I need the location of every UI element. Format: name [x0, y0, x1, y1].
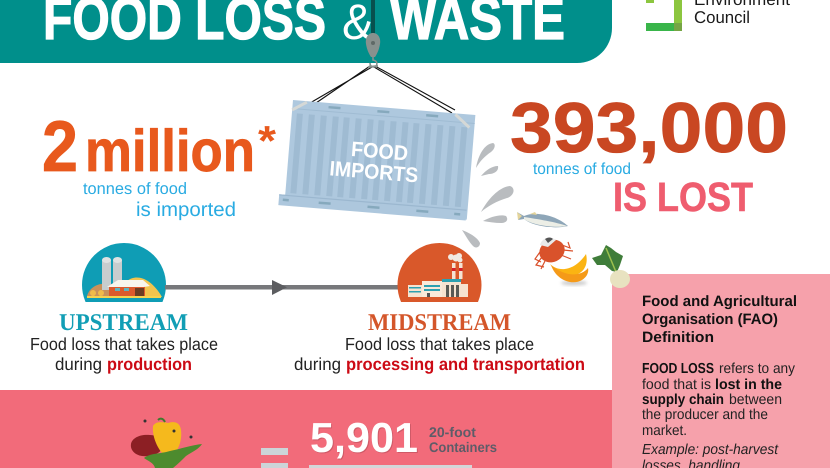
text: food loss definition: lost in the	[715, 377, 782, 393]
statistic: 2 million tonnes imported: tonnes of food	[83, 180, 187, 198]
panel: food waste statistic: 20-foot	[429, 424, 476, 440]
heading: FAO definition: Organisation (FAO)	[642, 311, 778, 328]
heading: FAO definition: Definition	[642, 329, 714, 346]
panel: upstream: production	[107, 354, 192, 374]
illustration: gray splashes	[462, 143, 514, 247]
illustration: crane ropes and hook	[310, 0, 455, 113]
text: food loss definition: supply chain	[642, 392, 724, 408]
panel: upstream: UPSTREAM	[59, 310, 188, 336]
logo: Environment Council: Council	[694, 8, 750, 27]
statistic: 393,000 tonnes lost: 393,000	[510, 89, 788, 168]
statistic: 2 million tonnes imported: is imported	[136, 199, 236, 221]
text: food loss definition: market.	[642, 423, 687, 439]
equals sign	[261, 448, 288, 468]
illustration: food imports container: IMPORTS	[329, 157, 419, 187]
text: food loss definition: food that is	[642, 377, 711, 393]
panel: food waste statistic: 5,901	[310, 414, 418, 461]
icon: factory	[398, 243, 482, 302]
illustration: food imports container	[278, 100, 475, 221]
arrow: upstream to midstream	[165, 280, 400, 295]
panel: midstream: during	[294, 354, 341, 374]
panel: midstream	[294, 243, 585, 374]
text: food loss definition: Example: post-harvest	[642, 442, 779, 458]
illustration: bananas	[550, 254, 588, 286]
panel: food waste statistic: 5,901	[311, 415, 419, 462]
panel: midstream: MIDSTREAM	[368, 310, 511, 336]
panel: FAO definition	[612, 274, 830, 468]
panel: upstream: during	[55, 354, 102, 374]
logo: Environment Council	[646, 0, 790, 31]
banner: title	[0, 0, 612, 63]
illustration: food imports container: FOOD	[350, 138, 409, 166]
text: food loss definition: between	[729, 392, 782, 408]
statistic: 393,000 tonnes lost: IS LOST	[613, 174, 753, 220]
statistic: 2 million tonnes imported	[42, 107, 277, 221]
heading: FAO definition: Food and Agricultural	[642, 293, 797, 310]
statistic: 393,000 tonnes lost: tonnes of food	[533, 161, 631, 178]
illustration: fish	[517, 212, 568, 227]
statistic: 393,000 tonnes lost	[510, 89, 788, 220]
panel: upstream	[30, 243, 218, 374]
heading: FAO definition	[642, 293, 797, 346]
text: food loss definition: the producer and the	[642, 407, 768, 423]
panel: upstream: Food loss that takes place	[30, 334, 218, 354]
statistic: 2 million tonnes imported: 2	[42, 107, 78, 187]
icon: farm	[82, 243, 166, 302]
text: food loss definition: refers to any	[719, 361, 796, 377]
panel: midstream: processing and transportation	[346, 354, 585, 374]
panel: food waste statistic: Containers	[429, 439, 497, 455]
panel: food waste statistic	[0, 390, 612, 468]
icon: rotten vegetables	[131, 419, 202, 468]
text: food loss definition: FOOD LOSS	[642, 361, 714, 377]
statistic: 2 million tonnes imported: million	[85, 118, 255, 184]
statistic: 2 million tonnes imported: *	[258, 117, 277, 164]
panel: midstream: Food loss that takes place	[345, 334, 534, 354]
illustration: crab	[535, 236, 573, 269]
illustration: turnip with leaves	[592, 245, 630, 288]
text: food loss definition	[642, 361, 796, 468]
